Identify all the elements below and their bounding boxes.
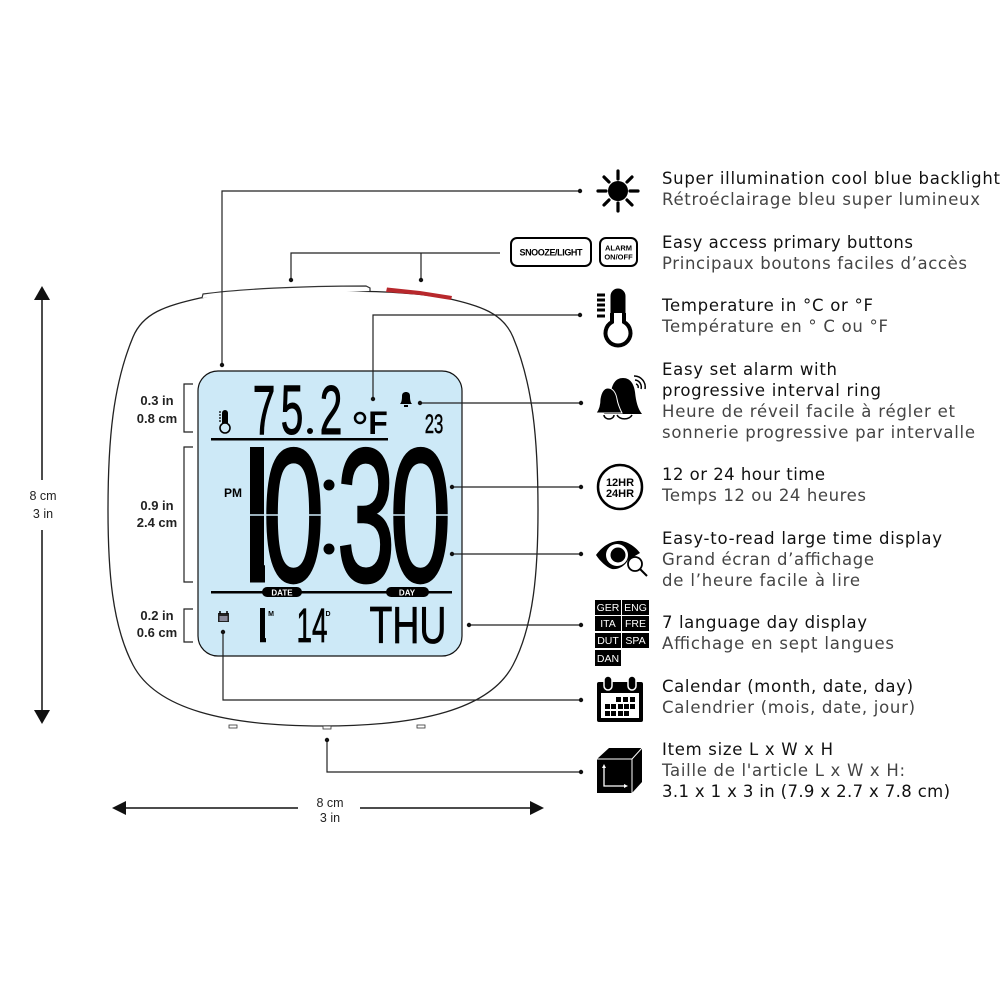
icon: 12 or 24 hour — [598, 465, 642, 509]
icon: language grid — [595, 600, 649, 666]
alarm seconds reading: 23 — [425, 409, 443, 439]
bracket and label: bottom line height: 0.2 in — [140, 608, 174, 623]
feature: backlight: Super illumination cool blue backlight — [662, 169, 1000, 188]
large time reading: 1 — [218, 410, 282, 622]
day tag — [386, 587, 429, 598]
feature: large display: de l’heure facile à lire — [662, 571, 860, 590]
leader lines — [220, 189, 583, 774]
icon: language grid: DUT — [597, 635, 619, 647]
date reading: 14 — [297, 599, 327, 653]
icon: calendar — [597, 676, 643, 722]
temperature rule — [211, 438, 388, 440]
bracket and label: top line height: 0.3 in — [140, 393, 174, 408]
icon: thermometer — [597, 288, 630, 345]
icon: sun — [598, 171, 638, 211]
date tag: DATE — [271, 588, 293, 598]
temperature reading — [253, 372, 342, 450]
bracket and label: bottom line height — [137, 608, 193, 642]
thermometer glyph on display — [219, 410, 230, 433]
feature: alarm: Heure de réveil facile à régler et — [662, 402, 956, 421]
degree fahrenheit unit — [355, 405, 388, 441]
temperature reading: 2 — [320, 372, 342, 450]
height dimension arrow — [29, 286, 57, 724]
icon: language grid: ENG — [624, 602, 647, 614]
feature: languages: Affichage en sept langues — [662, 634, 894, 653]
icon: language grid: FRE — [625, 618, 646, 630]
icon: alarm button: ALARM — [605, 244, 632, 252]
feature: languages — [662, 613, 894, 653]
large time reading: 3 — [337, 410, 395, 622]
icon: cube — [597, 748, 642, 793]
display panel — [198, 371, 462, 656]
feature: item size: 3.1 x 1 x 3 in (7.9 x 2.7 x 7.8 cm) — [662, 782, 950, 801]
feature: calendar — [662, 677, 915, 717]
snooze light button on clock — [202, 286, 370, 298]
feature: alarm: sonnerie progressive par intervalle — [662, 423, 975, 442]
icon: eye with magnifier — [596, 541, 647, 576]
bracket and label: time height: 0.9 in — [140, 498, 174, 513]
feature: hour format — [661, 465, 866, 505]
feature: temperature: Température en ° C ou °F — [661, 317, 888, 336]
alarm bell on display — [400, 392, 412, 407]
icon: 12 or 24 hour: 12HR — [606, 477, 634, 489]
icon: snooze light button — [511, 238, 591, 266]
width dimension arrow — [112, 796, 544, 825]
feature: large display: Grand écran d’affichage — [662, 550, 874, 569]
feature: hour format: 12 or 24 hour time — [662, 465, 825, 484]
feature: temperature: Temperature in °C or °F — [661, 296, 873, 315]
month reading: 1 — [256, 598, 268, 652]
large time reading: 0 — [390, 409, 451, 621]
height dimension arrow: 8 cm — [29, 489, 57, 503]
feature: languages: 7 language day display — [662, 613, 867, 632]
icon: language grid: SPA — [625, 635, 646, 647]
month reading: M — [268, 611, 274, 618]
feature: buttons — [662, 233, 967, 273]
icon: alarm bells — [596, 376, 645, 419]
clock body — [108, 291, 538, 729]
feature: calendar: Calendar (month, date, day) — [662, 677, 913, 696]
large time reading: 0 — [263, 409, 324, 621]
feature: alarm — [662, 360, 975, 442]
alarm button on clock — [386, 288, 452, 300]
large time reading — [250, 446, 448, 584]
temperature reading: 5 — [281, 372, 303, 450]
bracket and label: time height — [137, 447, 193, 582]
width dimension arrow: 3 in — [320, 811, 340, 825]
feature: backlight: Rétroéclairage bleu super lumineux — [662, 190, 980, 209]
feature: hour format: Temps 12 ou 24 heures — [661, 486, 866, 505]
feature: item size: Taille de l'article L x W x H: — [661, 761, 905, 780]
feature: calendar: Calendrier (mois, date, jour) — [662, 698, 915, 717]
weekday reading: THU — [370, 596, 446, 654]
feature: backlight — [662, 169, 1000, 209]
temperature reading: 7 — [253, 372, 275, 450]
icon: language grid: DAN — [597, 653, 619, 665]
degree fahrenheit unit: F — [368, 405, 388, 441]
feature: temperature — [661, 296, 888, 336]
feature: large display — [662, 529, 942, 590]
date tag — [262, 587, 302, 598]
bracket and label: top line height: 0.8 cm — [137, 411, 177, 426]
date reading: D — [325, 611, 331, 618]
icon: alarm button — [600, 238, 637, 266]
width dimension arrow: 8 cm — [316, 796, 344, 810]
month reading — [260, 608, 274, 642]
icon: alarm button: ON/OFF — [604, 252, 633, 262]
height dimension arrow: 3 in — [33, 507, 53, 521]
date and day rule — [211, 587, 452, 598]
feature: alarm: Easy set alarm with — [662, 360, 837, 379]
bracket and label: top line height — [137, 384, 193, 432]
day tag: DAY — [399, 588, 416, 598]
bracket and label: time height: 2.4 cm — [137, 515, 177, 530]
bracket and label: bottom line height: 0.6 cm — [137, 625, 177, 640]
feature: buttons: Principaux boutons faciles d’accès — [662, 254, 967, 273]
feature: large display: Easy-to-read large time display — [662, 529, 942, 548]
icon: language grid: GER — [597, 602, 620, 614]
feature: item size: Item size L x W x H — [662, 740, 833, 759]
icon: snooze light button: SNOOZE/LIGHT — [520, 248, 583, 258]
feature: item size — [661, 740, 950, 801]
feature: alarm: progressive interval ring — [662, 381, 881, 400]
feature: buttons: Easy access primary buttons — [662, 233, 913, 252]
calendar glyph on display — [218, 611, 229, 622]
pm indicator: PM — [224, 486, 242, 500]
icon: language grid: ITA — [600, 618, 616, 630]
icon: 12 or 24 hour: 24HR — [606, 488, 634, 500]
